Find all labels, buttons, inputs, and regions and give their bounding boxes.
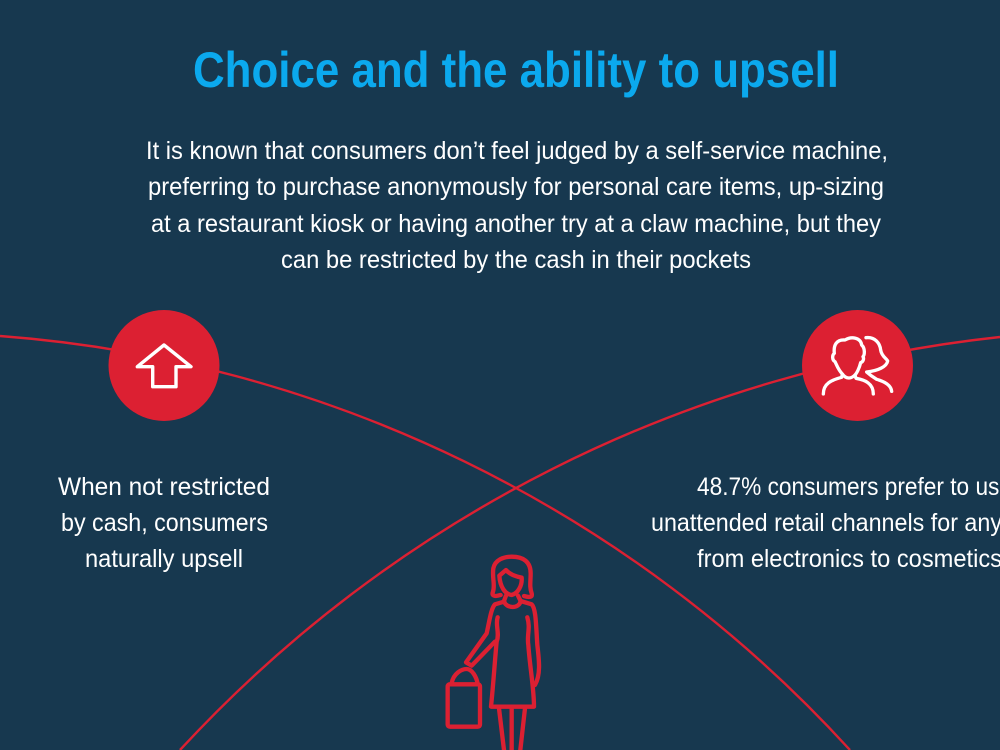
right caption <box>651 473 1000 573</box>
left caption <box>58 473 270 573</box>
crossing red arcs <box>0 336 1000 750</box>
intro paragraph: can be restricted by the cash in their pockets <box>281 246 751 274</box>
intro paragraph: preferring to purchase anonymously for personal care items, up-sizing <box>148 173 884 201</box>
left caption: by cash, consumers <box>61 509 268 537</box>
title: Choice and the ability to upsell <box>193 42 839 98</box>
intro paragraph <box>146 137 888 274</box>
left caption: When not restricted <box>58 473 270 501</box>
left caption: naturally upsell <box>85 545 243 573</box>
icon: upsell arrow in red circle <box>108 310 220 421</box>
icon: woman with shopping bag <box>448 557 539 750</box>
intro paragraph: It is known that consumers don’t feel judged by a self-service machine, <box>146 137 888 165</box>
intro paragraph: at a restaurant kiosk or having another try at a claw machine, but they <box>151 210 881 238</box>
icon: two people in red circle <box>802 310 913 421</box>
